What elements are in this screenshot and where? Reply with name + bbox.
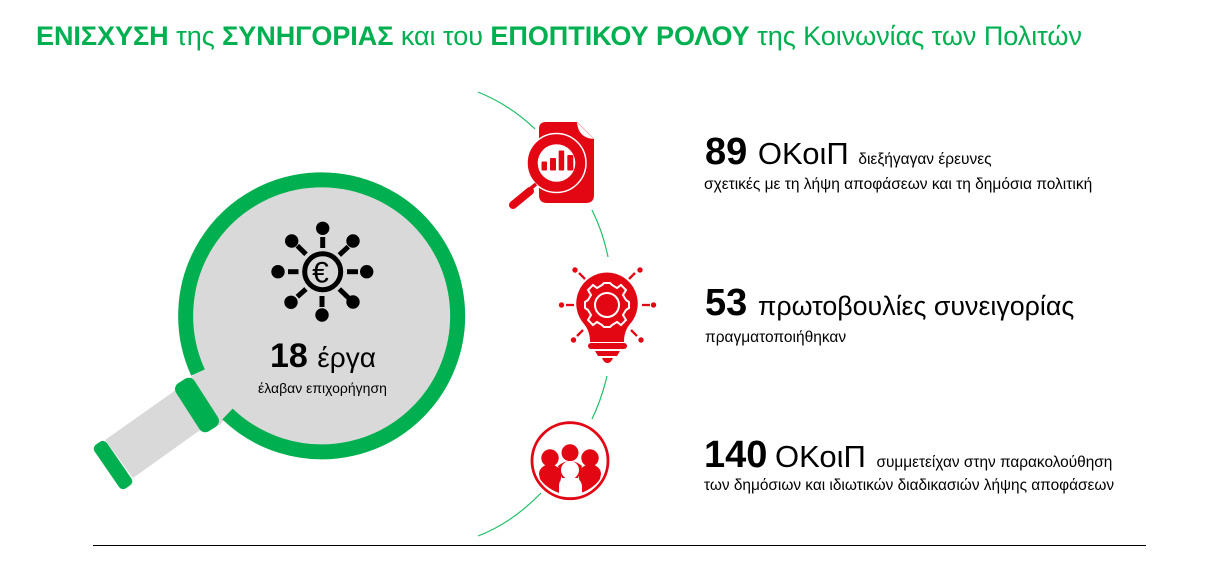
text: 53 initiatives: 53 πρωτοβουλίες συνειγορίας [705, 282, 1074, 324]
connecting arc: bottom [478, 493, 541, 536]
text: funded caption: έλαβαν επιχορήγηση [258, 380, 387, 396]
icon: research document with magnifier [513, 122, 594, 205]
magnifying glass [92, 180, 458, 491]
connecting arc: upper middle [592, 210, 608, 257]
icon: group of people [532, 423, 608, 499]
title: ΕΝΙΣΧΥΣΗ της ΣΥΝΗΓΟΡΙΑΣ και του ΕΠΟΠΤΙΚΟΥ ΡΟΛΟΥ της Κοινωνίας των Πολιτών [36, 20, 1082, 50]
connecting arc: top [478, 92, 535, 129]
text: 140 CSOs: 140 ΟΚοιΠ συμμετείχαν στην παρακολούθηση [704, 434, 1112, 476]
icon: euro network: € [312, 256, 329, 290]
text: 53 detail: πραγματοποιήθηκαν [705, 329, 846, 346]
text: 18 projects: 18 έργα [270, 337, 376, 375]
baseline rule [93, 544, 1146, 546]
text: 89 CSOs detail: σχετικές με τη λήψη αποφάσεων και τη δημόσια πολιτική [704, 176, 1092, 193]
icon: euro network [271, 222, 373, 322]
text: 140 detail: των δημόσιων και ιδιωτικών διαδικασιών λήψης αποφάσεων [704, 477, 1114, 494]
text: 89 CSOs: 89 ΟΚοιΠ διεξήγαγαν έρευνες [705, 130, 992, 172]
connecting arc: lower middle [592, 376, 607, 419]
icon: light bulb with gear [559, 267, 656, 363]
